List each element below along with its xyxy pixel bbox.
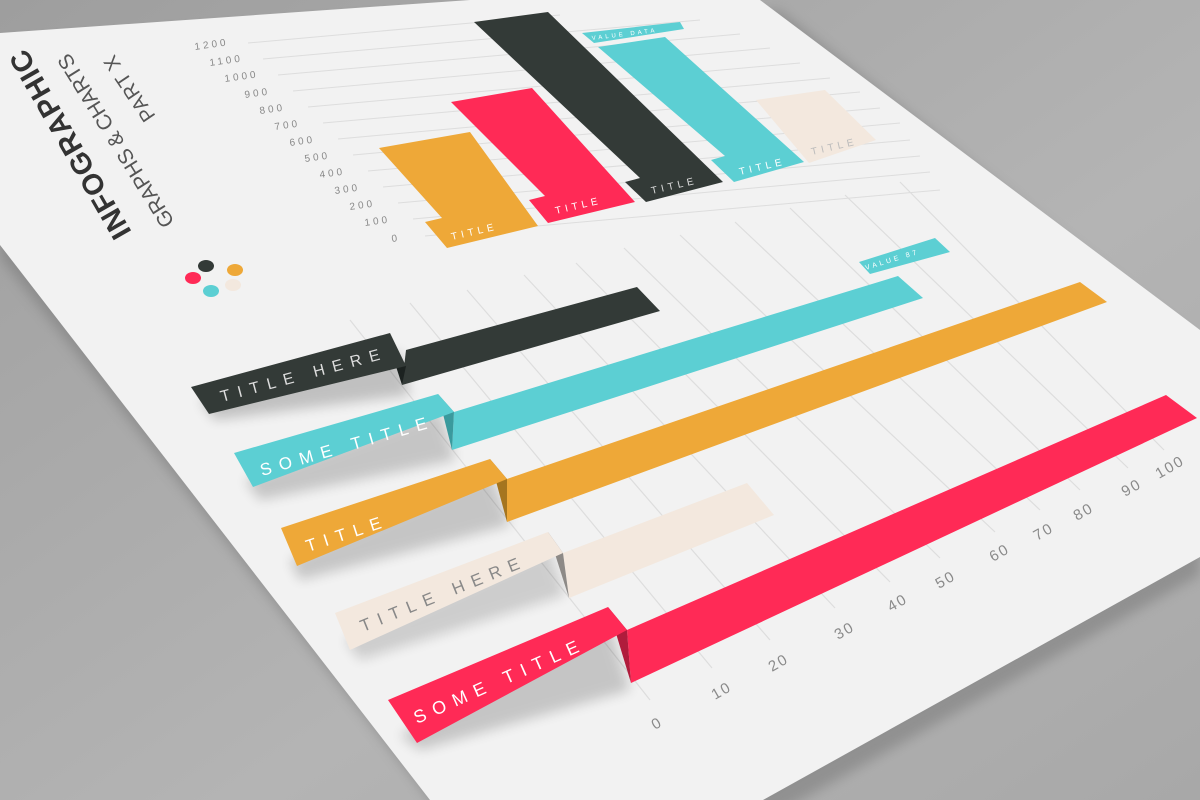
top chart: y axis labels and grid: 100 bbox=[364, 215, 391, 229]
x axis labels: 60 bbox=[986, 540, 1013, 565]
bar: orange bbox=[379, 132, 538, 248]
top chart: y axis labels and grid: 800 bbox=[259, 103, 286, 117]
title block: PART X bbox=[99, 50, 160, 126]
x axis labels: 70 bbox=[1030, 519, 1057, 544]
horizontal bar: teal: VALUE 87 bbox=[865, 249, 920, 272]
horizontal bar: dark bbox=[191, 287, 660, 420]
title block: GRAPHS & CHARTS bbox=[54, 49, 179, 232]
horizontal bar: dark: TITLE HERE bbox=[219, 345, 390, 406]
top chart: y axis labels and grid: 300 bbox=[334, 183, 361, 197]
x axis labels: 90 bbox=[1118, 475, 1145, 500]
top chart: y axis labels and grid: 600 bbox=[289, 135, 316, 149]
x axis labels: 100 bbox=[1152, 452, 1188, 482]
bar: pink bbox=[451, 88, 635, 223]
horizontal bar: orange bbox=[281, 282, 1107, 580]
top chart: y axis labels and grid: 700 bbox=[274, 119, 301, 133]
top chart: y axis labels and grid: 400 bbox=[319, 167, 346, 181]
bottom chart grid bbox=[350, 182, 1164, 700]
bar: pink: TITLE bbox=[554, 196, 603, 217]
bar: dark bbox=[474, 12, 723, 202]
x axis labels: 10 bbox=[708, 678, 735, 703]
horizontal bar: beige: TITLE HERE bbox=[357, 551, 530, 636]
x axis labels: 50 bbox=[932, 567, 959, 592]
top chart: y axis labels and grid: 1000 bbox=[224, 69, 259, 85]
bar: teal: TITLE bbox=[738, 157, 787, 178]
top chart: y axis labels and grid: 1100 bbox=[209, 53, 244, 69]
bar: orange: TITLE bbox=[450, 222, 499, 243]
top chart: y axis labels and grid: 1200 bbox=[194, 37, 229, 53]
horizontal bar: pink: SOME TITLE bbox=[410, 633, 589, 728]
top chart: y axis labels and grid: 0 bbox=[391, 233, 401, 245]
top chart: y axis labels and grid bbox=[194, 15, 940, 245]
top chart: vertical bars bbox=[379, 12, 876, 248]
x axis labels: 80 bbox=[1070, 499, 1097, 524]
x axis labels bbox=[648, 452, 1188, 733]
bar: dark: TITLE bbox=[650, 176, 699, 197]
horizontal bar: orange: TITLE bbox=[303, 511, 391, 556]
horizontal bar: teal bbox=[234, 238, 950, 500]
icon: color dots bbox=[185, 260, 243, 297]
bar: beige bbox=[756, 90, 876, 163]
x axis labels: 30 bbox=[832, 618, 858, 643]
top chart: y axis labels and grid: 500 bbox=[304, 151, 331, 165]
top chart: y axis labels and grid: 900 bbox=[244, 87, 271, 101]
horizontal bar: teal: SOME TITLE bbox=[258, 412, 437, 480]
bar: teal: VALUE DATA bbox=[592, 28, 658, 42]
bar: beige: TITLE bbox=[810, 137, 859, 158]
horizontal bar: beige bbox=[335, 483, 774, 660]
horizontal bar: pink bbox=[388, 395, 1197, 750]
x axis labels: 20 bbox=[766, 650, 792, 675]
x axis labels: 40 bbox=[884, 590, 911, 615]
title block: INFOGRAPHIC bbox=[3, 43, 138, 244]
bar: teal bbox=[582, 22, 804, 182]
top chart: y axis labels and grid: 200 bbox=[349, 199, 376, 213]
x axis labels: 0 bbox=[648, 714, 666, 733]
